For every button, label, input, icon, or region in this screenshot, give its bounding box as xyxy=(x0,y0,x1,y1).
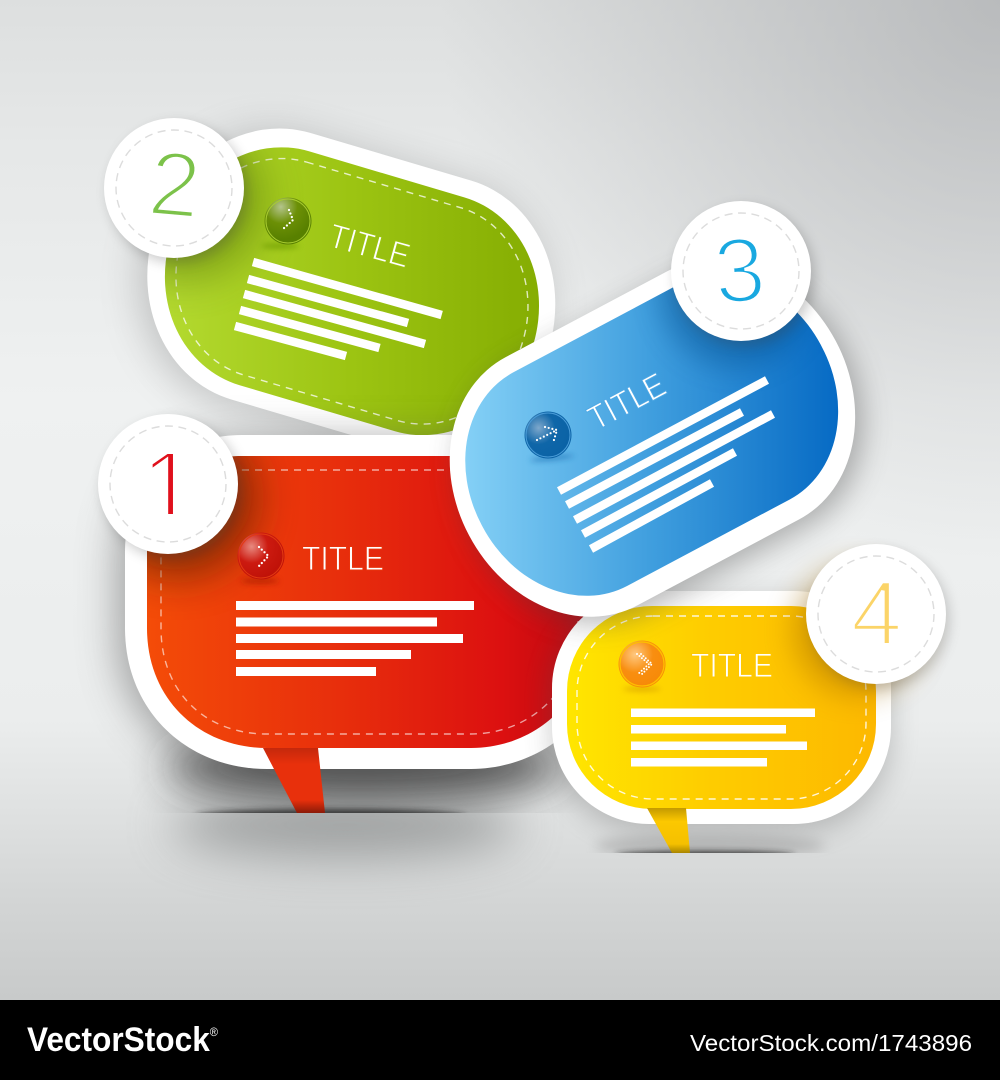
blue bubble white border xyxy=(403,217,902,660)
green stitching xyxy=(150,134,554,448)
blue badge shade xyxy=(650,288,808,374)
blue bubble fill xyxy=(425,239,878,633)
footer brand: ® xyxy=(210,1025,218,1039)
badge 3: 3 xyxy=(711,218,769,324)
panel 3: blue bubble xyxy=(444,264,878,638)
badge 1 xyxy=(98,414,242,559)
green button icon xyxy=(261,198,312,248)
yellow ground shadow xyxy=(596,831,824,853)
red pointer xyxy=(263,748,325,813)
yellow bubble white border xyxy=(552,591,891,824)
blue button icon xyxy=(524,412,574,462)
badge 4 xyxy=(806,544,950,689)
green title: TITLE xyxy=(325,217,414,276)
yellow title: TITLE xyxy=(691,647,773,685)
red ground shadow xyxy=(165,738,565,823)
blue bubble shadow xyxy=(411,224,910,667)
yellow bubble shadow xyxy=(552,599,891,832)
badge 4: 4 xyxy=(851,563,902,665)
footer url: VectorStock.com/1743896 xyxy=(690,1030,972,1056)
yellow bubble fill xyxy=(567,606,876,809)
badge 3 xyxy=(671,201,815,346)
red bubble white border xyxy=(125,435,613,769)
green text bars xyxy=(235,262,442,356)
blue text bars xyxy=(559,380,773,549)
red text bars xyxy=(236,601,474,676)
red bubble shadow xyxy=(117,439,605,773)
yellow pointer xyxy=(647,808,690,853)
badge 1: 1 xyxy=(141,431,197,543)
red button icon xyxy=(238,532,284,584)
yellow button icon xyxy=(618,640,666,691)
panel 4: yellow bubble xyxy=(552,564,924,859)
green bubble shadow xyxy=(107,102,581,486)
panel 1: red bubble xyxy=(98,418,613,823)
badge 2 xyxy=(104,118,248,263)
yellow text bars xyxy=(631,708,815,766)
footer bar xyxy=(0,1000,1000,1080)
green bubble white border xyxy=(114,98,588,482)
red title: TITLE xyxy=(302,540,384,578)
blue title: TITLE xyxy=(582,366,672,438)
yellow stitching xyxy=(577,616,866,799)
badge 2: 2 xyxy=(145,132,205,238)
yellow badge shade xyxy=(792,564,924,696)
red badge shade xyxy=(147,456,282,604)
red bubble fill xyxy=(147,456,591,748)
red stitching xyxy=(161,470,578,734)
footer brand: VectorStock xyxy=(27,1021,224,1059)
green bubble fill xyxy=(136,121,568,462)
panel 2: green bubble xyxy=(123,116,564,435)
green badge shade xyxy=(165,149,280,300)
